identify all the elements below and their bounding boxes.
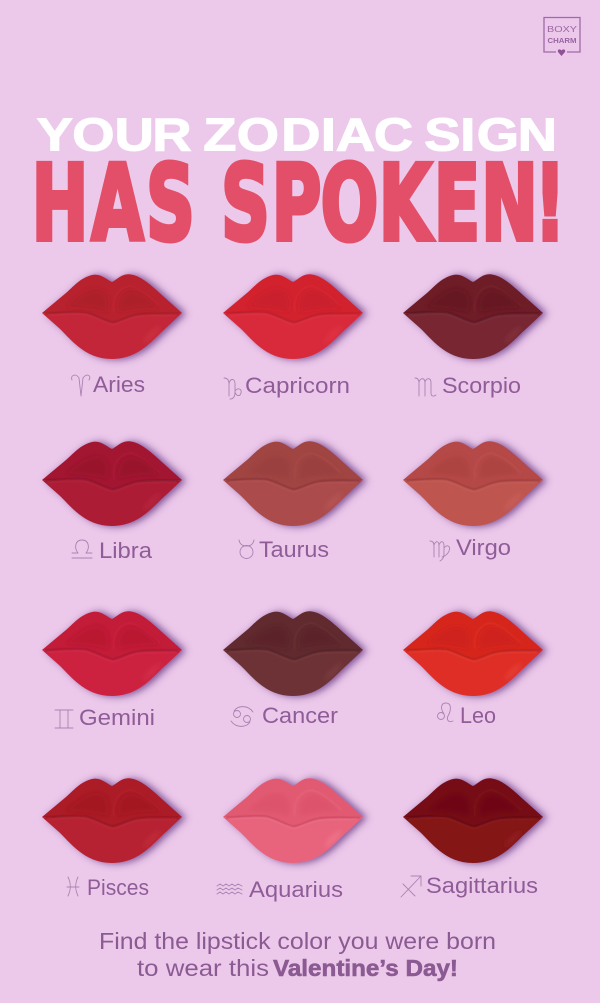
label: Aquarius: Aquarius [249, 877, 343, 902]
label: Virgo [430, 535, 511, 561]
lips: Aries [42, 274, 182, 359]
label: Gemini [55, 705, 155, 730]
label: Cancer [231, 703, 338, 728]
footer text: to wear this [137, 955, 269, 981]
label: Leo [438, 703, 496, 728]
lips: Virgo [403, 441, 543, 526]
label: Libra: Libra [99, 538, 153, 563]
label: Leo: Leo [460, 703, 496, 728]
label: Taurus: Taurus [259, 537, 329, 562]
label: Scorpio: Scorpio [442, 373, 521, 398]
logo: Boxy Charm: CHARM [548, 36, 576, 45]
lips: Libra [42, 441, 182, 526]
label: Virgo: Virgo [456, 535, 511, 560]
title: Your Zodiac Sign: YOUR ZODIAC SIGN [37, 108, 557, 161]
footer text: Valentine’s Day! [273, 955, 458, 981]
lips: Cancer [223, 611, 363, 696]
lips: Leo [403, 611, 543, 696]
logo: Boxy Charm [544, 18, 580, 56]
logo: Boxy Charm: BOXY [547, 24, 577, 34]
footer text [99, 928, 496, 981]
icon: heart [558, 49, 565, 56]
lips: Aquarius [223, 778, 363, 863]
label: Sagittarius: Sagittarius [426, 873, 538, 898]
label: Libra [72, 538, 153, 563]
lips: Gemini [42, 611, 182, 696]
lips: Sagittarius [403, 778, 543, 863]
lips: Capricorn [223, 274, 363, 359]
heading: Has Spoken!: HAS SPOKEN! [32, 143, 566, 264]
label: Aquarius [217, 877, 343, 902]
label: Gemini: Gemini [79, 705, 155, 730]
lips: Taurus [223, 441, 363, 526]
footer text: Find the lipstick color you were born [99, 928, 496, 954]
label: Pisces: Pisces [87, 875, 149, 900]
label: Aries: Aries [93, 372, 145, 397]
lips: Pisces [42, 778, 182, 863]
label: Cancer: Cancer [262, 703, 338, 728]
lips: Scorpio [403, 274, 543, 359]
label: Aries [72, 372, 145, 397]
label: Capricorn: Capricorn [245, 373, 350, 398]
